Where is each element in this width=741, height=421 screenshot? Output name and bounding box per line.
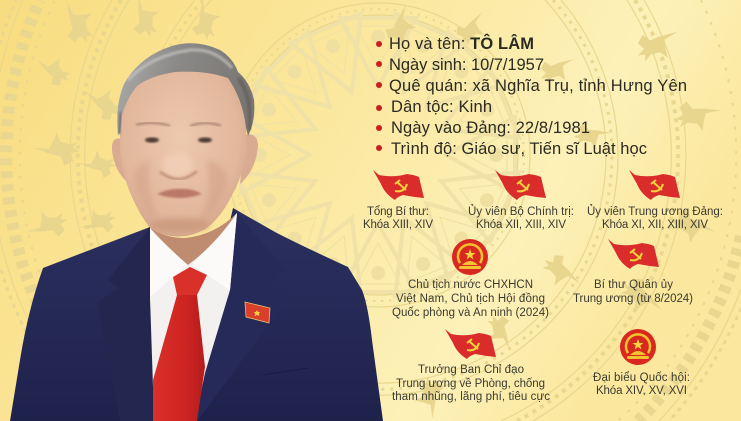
eyes (145, 137, 212, 143)
nose (160, 171, 197, 179)
role: Trưởng Ban Chỉ đạo: Trưởng Ban Chỉ đạo (418, 364, 524, 376)
personal info list: Quê quán: xã Nghĩa Trụ, tỉnh Hưng Yên (389, 77, 687, 95)
role: Trưởng Ban Chỉ đạo (392, 329, 550, 403)
lapel pin (245, 302, 270, 323)
role: Chủ tịch nước (392, 239, 549, 319)
suit (10, 208, 383, 421)
tie (153, 267, 207, 421)
eyebrows (136, 123, 221, 126)
role: Ủy viên Bộ Chính trị (468, 170, 574, 231)
hair (117, 43, 254, 136)
role: Bí thư Quân ủy: Bí thư Quân ủy (594, 279, 673, 291)
personal info list: Họ và tên: TÔ LÂM (389, 34, 534, 53)
neck (150, 213, 237, 265)
bullets (376, 41, 382, 151)
role: Ủy viên Trung ương Đảng (587, 170, 723, 231)
lapels (97, 208, 308, 421)
role: Chủ tịch nước: Quốc phòng và An ninh (2024) (392, 307, 549, 319)
role: Chủ tịch nước: Chủ tịch nước CHXHCN (408, 279, 533, 291)
role: Ủy viên Bộ Chính trị: Khóa XII, XIII, XIV (476, 219, 566, 231)
role: Chủ tịch nước: Việt Nam, Chủ tịch Hội đồng (396, 293, 545, 305)
role: Ủy viên Trung ương Đảng: Ủy viên Trung ương Đảng: (587, 205, 723, 218)
face shading (134, 152, 227, 232)
role: Bí thư Quân ủy (573, 239, 693, 305)
face (120, 66, 247, 237)
role: Tổng Bí thư: Khóa XIII, XIV (363, 219, 433, 231)
personal info list: Trình độ: Giáo sư, Tiến sĩ Luật học (391, 140, 647, 158)
role: Đại biểu Quốc hội: Khóa XIV, XV, XVI (596, 385, 687, 397)
collar (150, 213, 237, 297)
role: Bí thư Quân ủy: Trung ương (từ 8/2024) (573, 293, 693, 305)
role: Tổng Bí thư: Tổng Bí thư: (367, 206, 429, 218)
personal info list: Ngày vào Đảng: 22/8/1981 (391, 119, 590, 137)
role: Trưởng Ban Chỉ đạo: tham nhũng, lãng phí, tiêu cực (392, 391, 550, 403)
portrait of the person (10, 43, 383, 421)
personal info list: Dân tộc: Kinh (391, 98, 492, 116)
role: Ủy viên Bộ Chính trị: Ủy viên Bộ Chính trị: (468, 205, 574, 218)
ears (112, 138, 127, 182)
role: Đại biểu Quốc hội (593, 329, 690, 397)
role: Ủy viên Trung ương Đảng: Khóa XI, XII, XIII, XIV (602, 219, 708, 231)
role: Đại biểu Quốc hội: Đại biểu Quốc hội: (593, 372, 690, 384)
personal info list: Ngày sinh: 10/7/1957 (389, 56, 544, 74)
role: Tổng Bí thư (363, 170, 433, 231)
mouth (157, 189, 202, 198)
personal info list (376, 34, 687, 158)
role: Trưởng Ban Chỉ đạo: Trung ương về Phòng, chống (396, 378, 545, 390)
shirt (150, 213, 237, 421)
